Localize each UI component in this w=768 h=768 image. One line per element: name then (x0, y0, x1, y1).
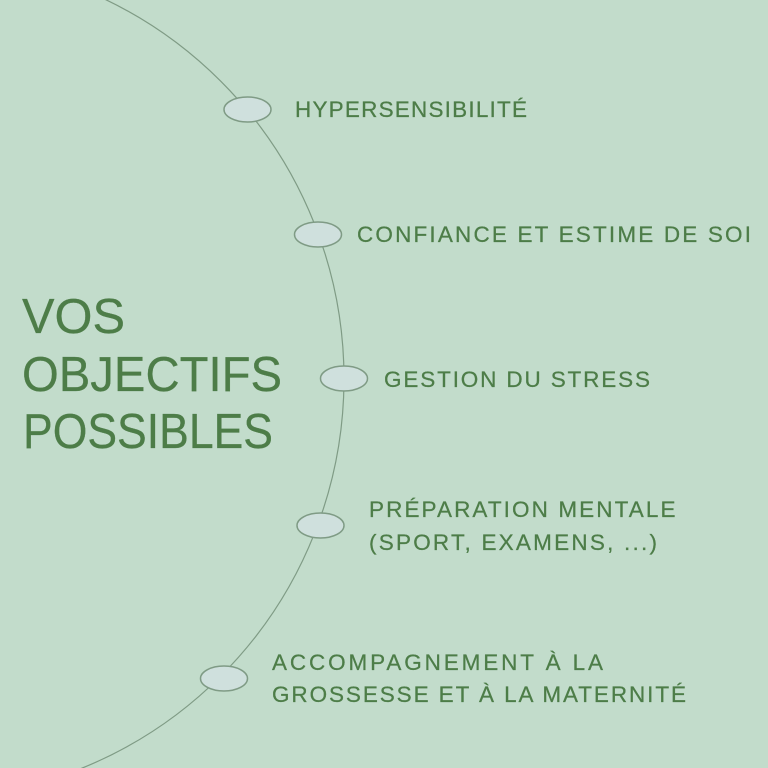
item: confiance et estime de soi (294, 222, 751, 247)
node marker 4 (297, 513, 344, 538)
label 4 (369, 497, 676, 555)
node marker 1 (224, 97, 271, 122)
label 5 (272, 650, 686, 707)
title (22, 290, 282, 459)
label 4: (SPORT, EXAMENS, ...) (369, 530, 657, 555)
label 5: GROSSESSE ET À LA MATERNITÉ (272, 682, 686, 707)
node marker 3 (320, 366, 368, 391)
title: OBJECTIFS (22, 348, 282, 402)
label 5: ACCOMPAGNEMENT À LA (272, 650, 603, 675)
title: VOS (22, 290, 125, 344)
title: POSSIBLES (23, 405, 273, 459)
label 1: HYPERSENSIBILITÉ (295, 97, 527, 122)
label 4: PRÉPARATION MENTALE (369, 497, 676, 522)
node marker 2 (294, 222, 342, 247)
label 2: CONFIANCE ET ESTIME DE SOI (357, 222, 751, 247)
label 3: GESTION DU STRESS (384, 367, 650, 392)
item: hypersensibilité (224, 97, 527, 122)
item: accompagnement (200, 650, 686, 707)
node marker 5 (200, 666, 248, 691)
item: gestion du stress (320, 366, 650, 392)
item: préparation mentale (297, 497, 676, 555)
curved arc connecting the items (0, 0, 344, 768)
